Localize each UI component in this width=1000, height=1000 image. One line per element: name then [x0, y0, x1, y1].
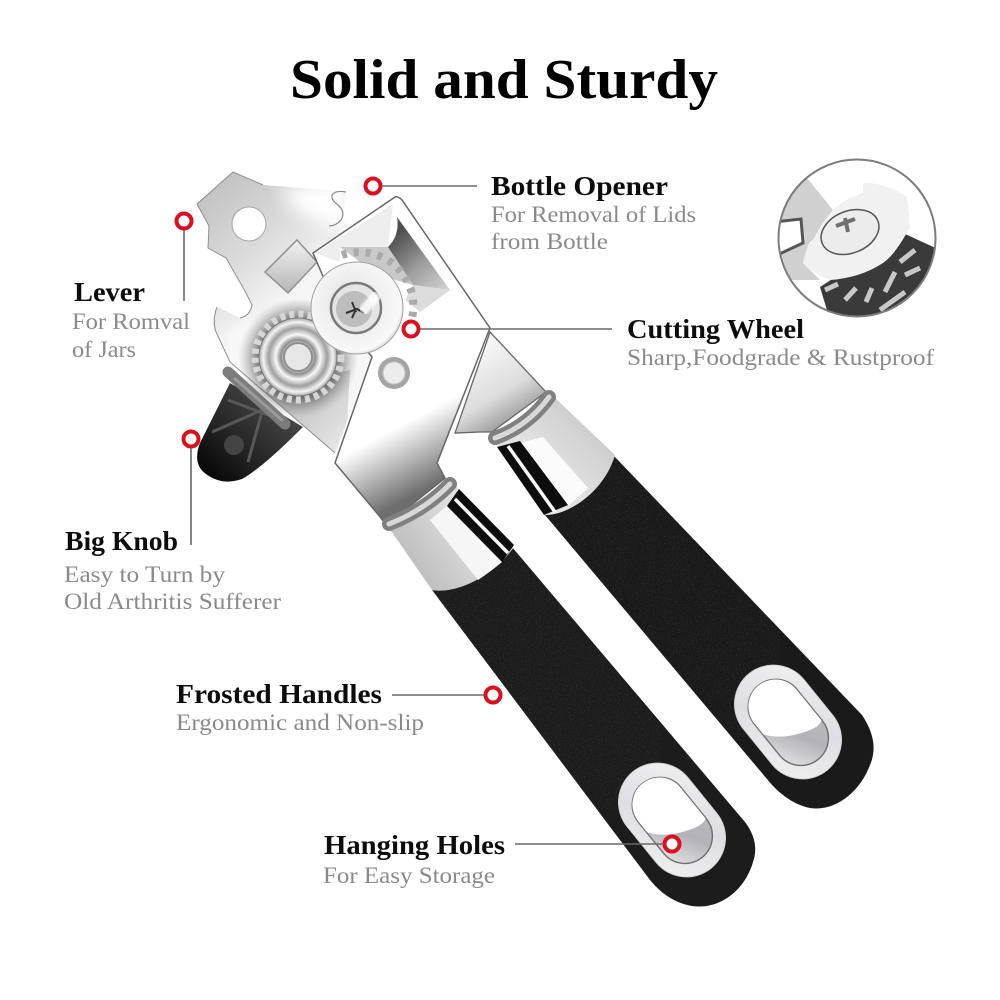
callout: cutting wheel: Cutting Wheel	[627, 314, 805, 344]
main body plate	[313, 197, 490, 523]
callout: big knob: Easy to Turn by	[64, 562, 226, 587]
lever tab	[265, 240, 317, 293]
handle left	[420, 540, 755, 907]
lever hole	[232, 207, 266, 241]
callout: bottle opener: For Removal of Lids	[491, 202, 696, 227]
callout: cutting wheel: Sharp,Foodgrade & Rustproof	[627, 345, 934, 370]
callout: hanging holes: For Easy Storage	[323, 863, 495, 888]
callout: hanging holes: Hanging Holes	[324, 830, 505, 860]
callout: big knob: Big Knob	[65, 526, 178, 556]
callout: big knob	[64, 432, 281, 614]
title: Solid and Sturdy	[290, 49, 718, 111]
inset screw	[814, 201, 886, 263]
callout: frosted handles: Ergonomic and Non-slip	[176, 710, 424, 735]
right plate	[455, 332, 546, 433]
callout: hanging holes	[323, 830, 680, 888]
big knob	[197, 372, 303, 482]
hanging hole right	[719, 649, 857, 795]
chrome collar left	[387, 482, 514, 591]
callout: frosted handles: Frosted Handles	[176, 679, 382, 709]
small toothed gear	[256, 315, 340, 399]
pressed corner of head	[315, 204, 450, 312]
callout: frosted handles	[176, 679, 500, 735]
callout: bottle opener	[366, 171, 696, 254]
shadow around wheels	[238, 298, 358, 418]
callout: cutting wheel	[404, 314, 934, 370]
opener hook	[329, 191, 346, 226]
lever plate	[196, 171, 371, 454]
hanging hole left	[603, 747, 741, 893]
cutting wheel	[311, 252, 413, 354]
rivet	[378, 357, 410, 389]
inset: cutting wheel close-up	[770, 159, 940, 320]
chrome collar right	[494, 395, 615, 515]
callout: bottle opener: Bottle Opener	[491, 171, 668, 201]
callout: lever	[72, 214, 192, 362]
callout: lever: Lever	[74, 277, 145, 307]
can opener illustration	[190, 165, 874, 907]
callout: lever: of Jars	[72, 337, 136, 362]
callout: bottle opener: from Bottle	[491, 229, 608, 254]
callout: big knob: Old Arthritis Sufferer	[64, 589, 281, 614]
callout: lever: For Romval	[72, 309, 190, 334]
handle right	[540, 450, 874, 809]
